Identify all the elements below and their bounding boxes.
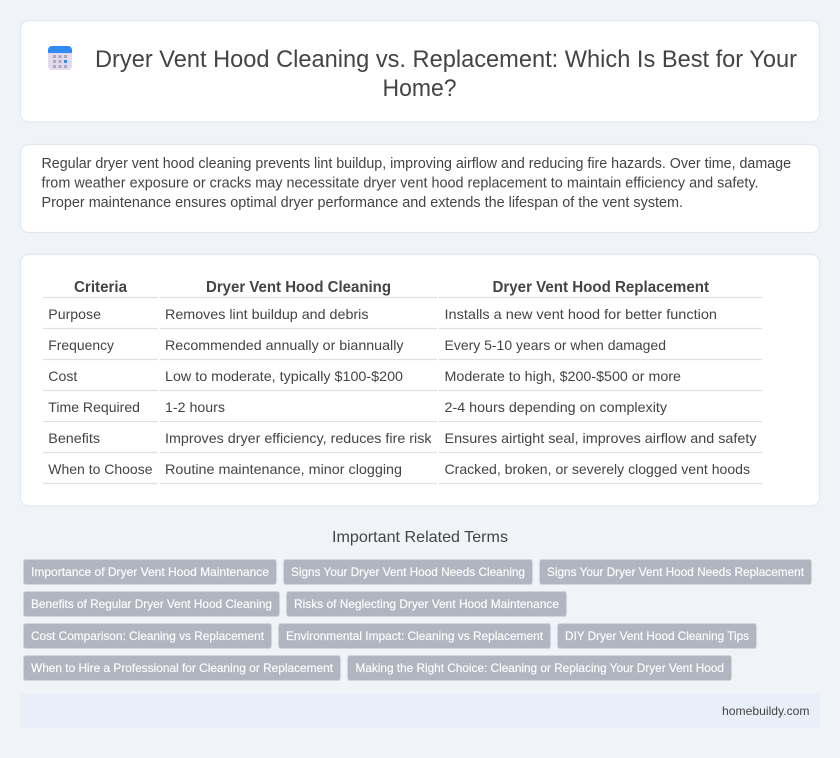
tag: Signs Your Dryer Vent Hood Needs Replacement: [547, 565, 805, 579]
table row: benefits: Ensures airtight seal, improves airflow and safety: [444, 430, 756, 446]
title: Dryer Vent Hood Cleaning vs. Replacement: Which Is Best for Your: [95, 46, 797, 73]
tag: [24, 560, 276, 584]
table row: frequency: Recommended annually or biannually: [165, 337, 404, 353]
tag: [24, 592, 280, 616]
tag: [278, 624, 550, 648]
text block: intro paragraph: Regular dryer vent hood cleaning prevents lint buildup, improving airflow and reducing fire hazards. Over time, damage: [42, 156, 791, 172]
tag: Signs Your Dryer Vent Hood Needs Cleaning: [291, 565, 525, 579]
table row: purpose: [48, 306, 717, 322]
tag: [558, 624, 756, 648]
table header row: Dryer Vent Hood Replacement: [492, 279, 709, 296]
title: [95, 46, 797, 102]
tag: Risks of Neglecting Dryer Vent Hood Maintenance: [294, 597, 559, 611]
tag: [24, 624, 272, 648]
panel: header card: [20, 20, 820, 122]
table row: when to choose: When to Choose: [48, 461, 153, 477]
tag: Making the Right Choice: Cleaning or Replacing Your Dryer Vent Hood: [356, 661, 724, 675]
text block: intro paragraph: Proper maintenance ensures optimal dryer performance and extends the lifespan of the vent system.: [42, 195, 683, 211]
panel: comparison table card: [20, 254, 820, 506]
table row: time required: [48, 399, 667, 415]
table row: frequency: [48, 337, 666, 353]
table header row: [74, 279, 709, 296]
table row: benefits: Improves dryer efficiency, reduces fire risk: [165, 430, 433, 446]
table row: cost: Low to moderate, typically $100-$200: [165, 368, 403, 384]
tag: When to Hire a Professional for Cleaning or Replacement: [31, 661, 334, 675]
table row: time required: 2-4 hours depending on complexity: [444, 399, 667, 415]
table row: purpose: Purpose: [48, 306, 101, 322]
tag: [348, 656, 732, 680]
panel: intro paragraph card: [20, 144, 820, 232]
table row: frequency: Every 5-10 years or when damaged: [444, 337, 666, 353]
tags: related terms: [24, 560, 812, 680]
table row: when to choose: Routine maintenance, minor clogging: [165, 461, 402, 477]
footer: [20, 694, 820, 728]
heading: important related terms: Important Related Terms: [332, 529, 508, 546]
table row: time required: Time Required: [48, 399, 140, 415]
table row: cost: Cost: [48, 368, 77, 384]
table row: cost: Moderate to high, $200-$500 or more: [444, 368, 681, 384]
tag: Importance of Dryer Vent Hood Maintenance: [31, 565, 269, 579]
footer source text: homebuildy.com: [722, 704, 810, 718]
tag: [24, 656, 340, 680]
tag: [540, 560, 812, 584]
tag: [286, 592, 566, 616]
table row: when to choose: Cracked, broken, or severely clogged vent hoods: [444, 461, 750, 477]
table row: when to choose: [48, 461, 750, 477]
table header row: Dryer Vent Hood Cleaning: [206, 279, 391, 296]
table header row: Criteria: [74, 279, 127, 296]
tag: [284, 560, 532, 584]
table row: time required: 1-2 hours: [165, 399, 225, 415]
table row: purpose: Installs a new vent hood for better function: [444, 306, 717, 322]
table row: purpose: Removes lint buildup and debris: [165, 306, 368, 322]
icon: calendar: [48, 46, 72, 70]
tag: DIY Dryer Vent Hood Cleaning Tips: [565, 629, 749, 643]
tag: Cost Comparison: Cleaning vs Replacement: [31, 629, 265, 643]
text block: intro paragraph: from weather exposure or cracks may necessitate dryer vent hood replacement to maintain efficiency and safety.: [42, 176, 758, 192]
table row: cost: [48, 368, 681, 384]
table row: benefits: Benefits: [48, 430, 100, 446]
tag: Environmental Impact: Cleaning vs Replacement: [286, 629, 544, 643]
title: Home?: [382, 75, 456, 102]
tag: Benefits of Regular Dryer Vent Hood Cleaning: [31, 597, 272, 611]
table row: benefits: [48, 430, 757, 446]
table row: frequency: Frequency: [48, 337, 114, 353]
text block: intro paragraph: [42, 156, 791, 211]
